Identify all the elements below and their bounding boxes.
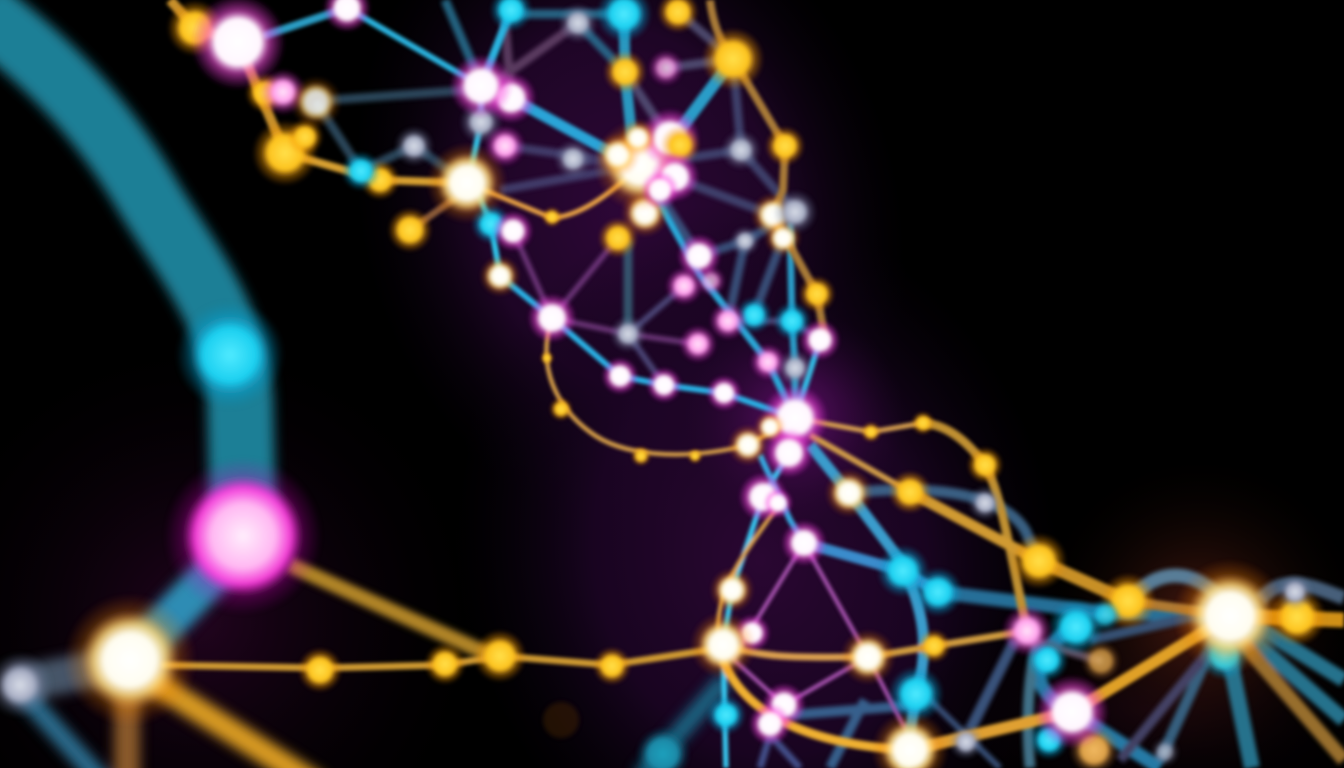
blurred orange link to midline — [290, 565, 490, 655]
cyan links, upper network — [266, 8, 820, 418]
nodes: grey — [390, 0, 1317, 768]
orange links, upper network — [170, 0, 825, 454]
large blurred foreground cyan band and links — [0, 10, 725, 768]
bright links, central junction and lower strand — [160, 418, 1344, 768]
dim links, lower right network — [760, 490, 1344, 768]
dim background links, upper network — [316, 0, 820, 385]
nodes: large foreground — [0, 289, 579, 738]
nodes: pink and magenta — [255, 46, 1058, 748]
nodes: cyan — [337, 0, 1254, 768]
